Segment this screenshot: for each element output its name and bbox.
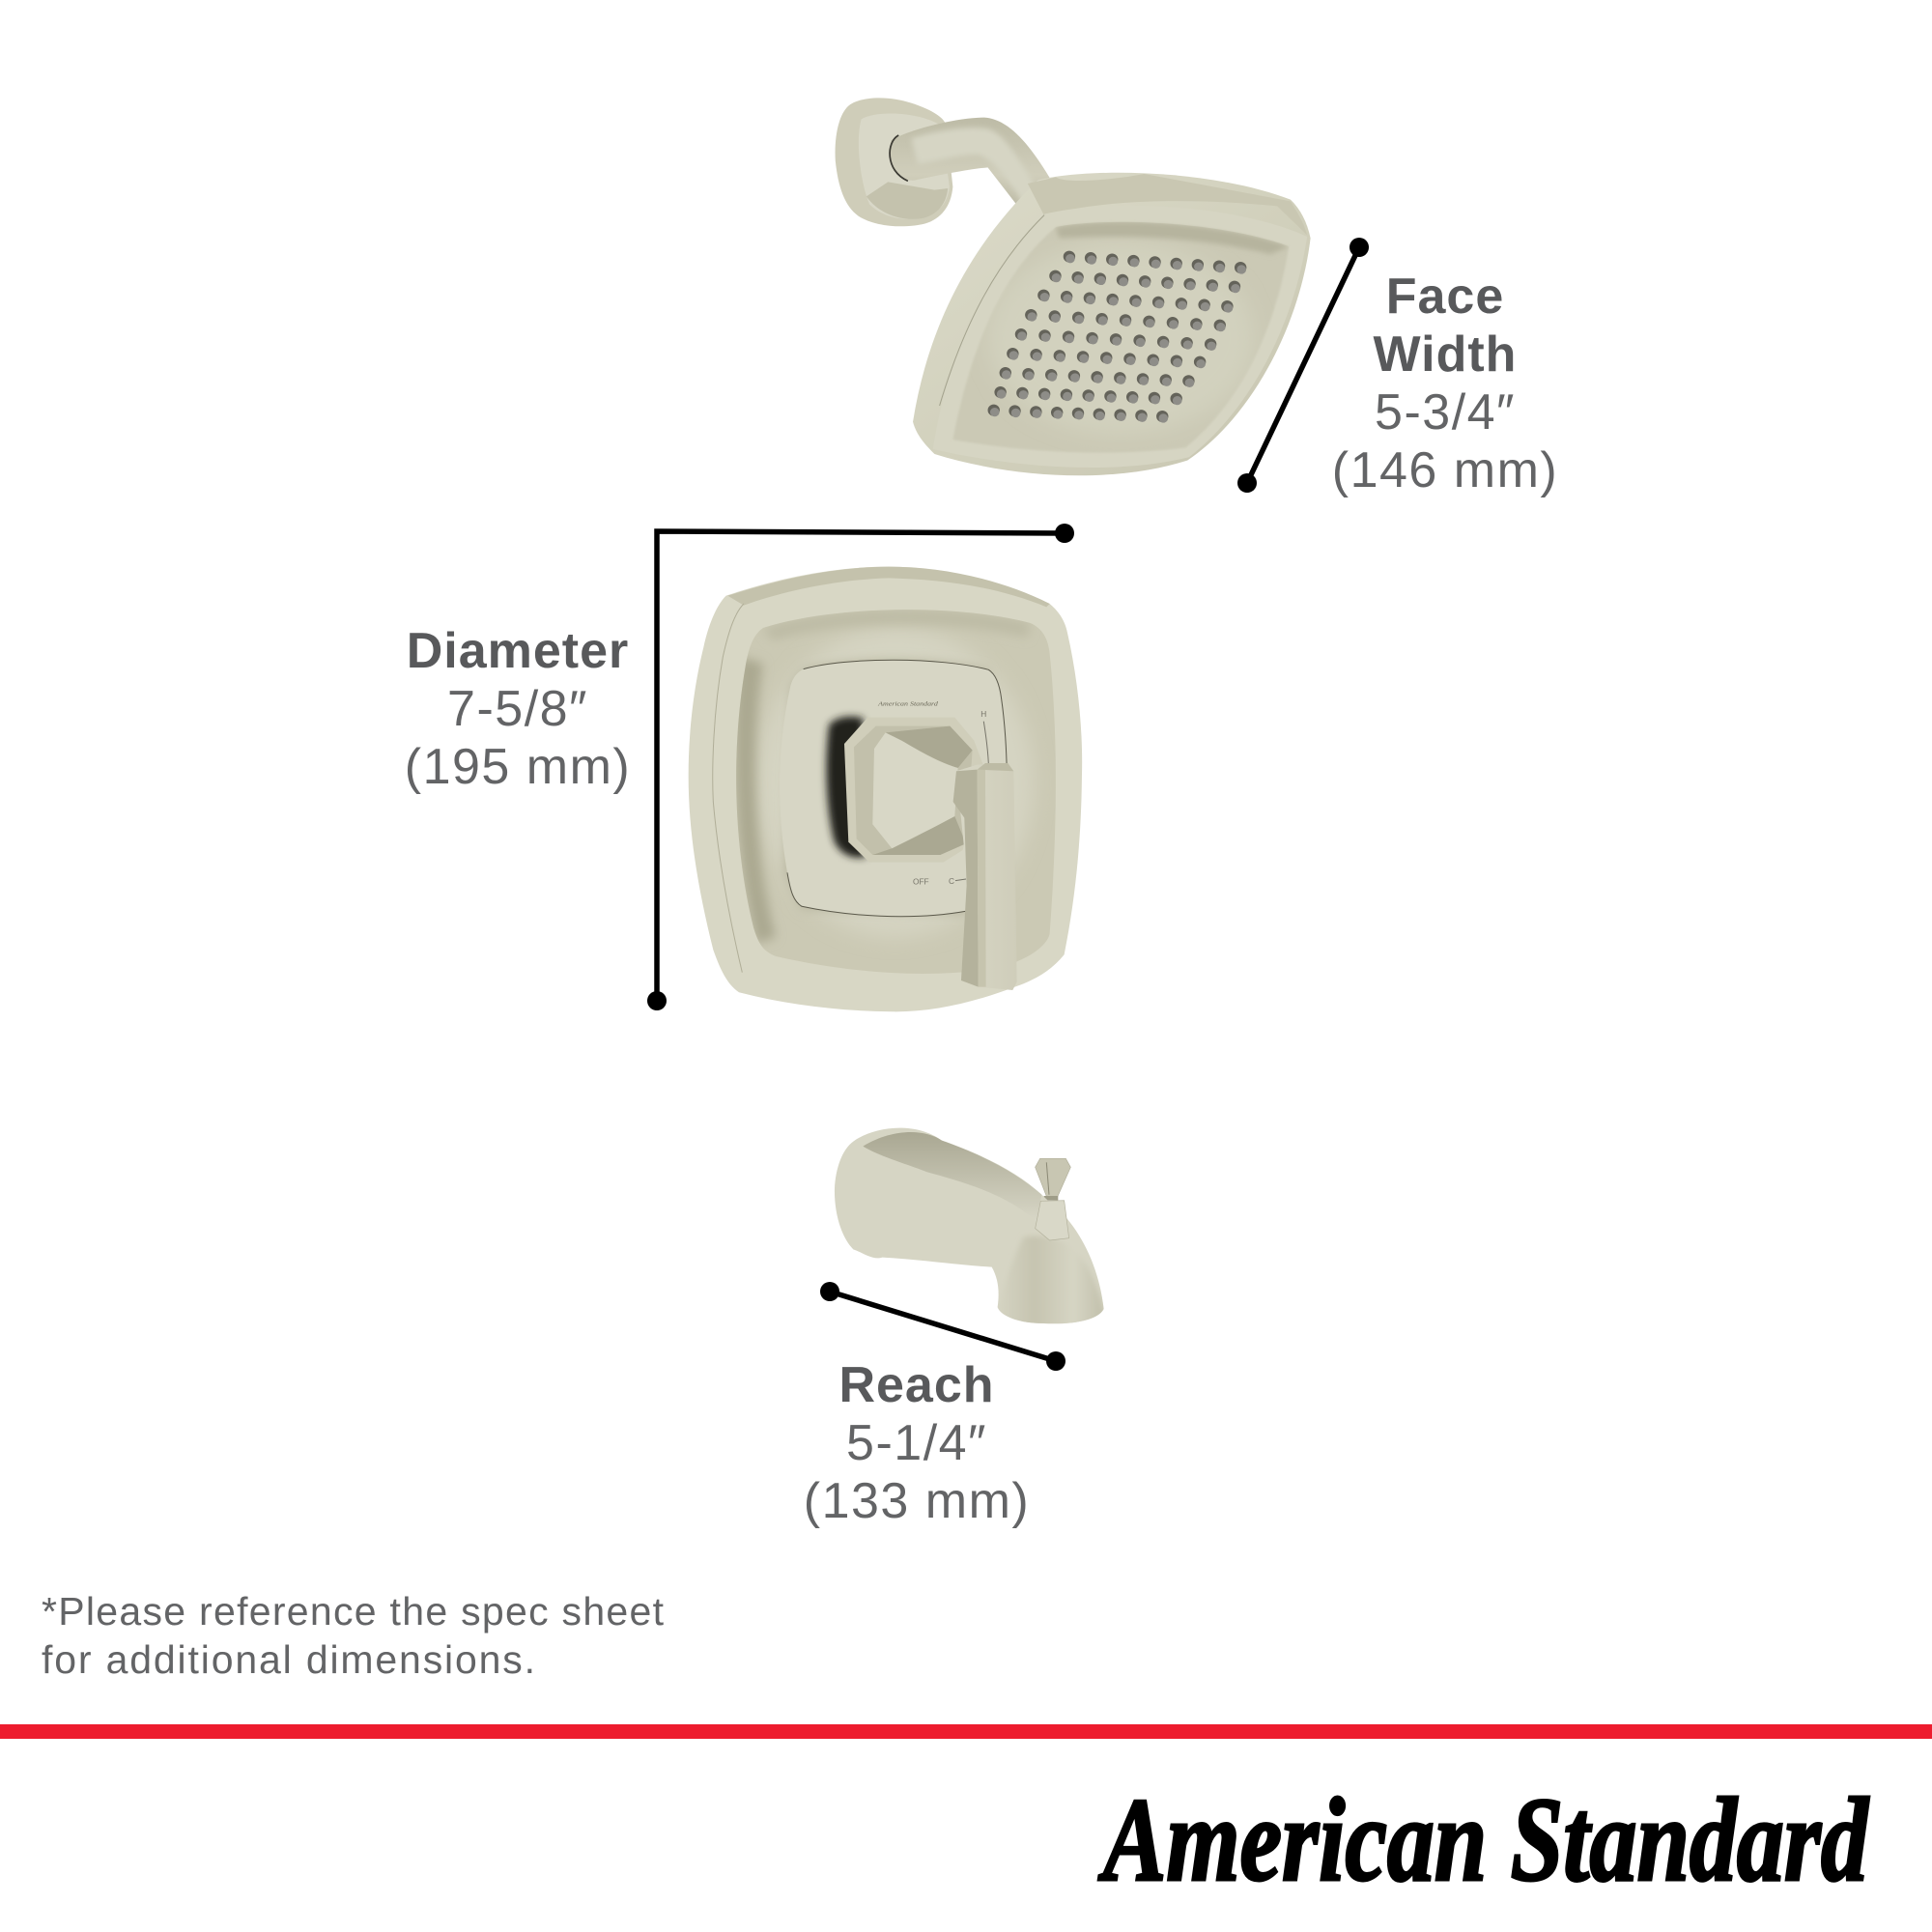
spout body [835,1128,1104,1323]
label: face width: 5-3/4″ [1375,384,1516,440]
label: reach [804,1357,1030,1529]
spray nozzles [994,257,1242,418]
footnote [42,1589,665,1682]
label: reach: 5-1/4″ [846,1415,987,1471]
label: reach: Reach [838,1357,995,1413]
stamped brand text: American Standard [877,701,939,708]
dimension line: reach [820,1282,1065,1371]
hot marker [980,709,988,763]
knob shadow [827,717,867,858]
spout neck shading [995,1236,1108,1326]
shower arm [890,118,1071,232]
label: diameter: Diameter [407,623,629,679]
label: diameter: 7-5/8″ [447,681,588,737]
centre escutcheon [780,660,1007,917]
off and cold markers: OFF [913,877,929,887]
label: diameter [405,623,631,795]
label: diameter: (195 mm) [405,739,631,795]
wall flange [836,98,952,226]
plate recess [736,610,1056,974]
label: reach: (133 mm) [804,1473,1030,1529]
label: face width: Width [1374,327,1517,383]
hot marker: H [980,709,986,719]
octagonal knob [844,718,983,863]
off and cold markers [913,876,966,887]
dimension line: face width [1237,238,1369,493]
head recessed face [952,222,1289,453]
footnote: *Please reference the spec sheet [42,1589,665,1634]
head inner rim [933,206,1307,468]
footnote: for additional dimensions. [42,1637,535,1682]
off and cold markers: C [949,876,954,886]
lever handle [953,763,1017,990]
head collar [1028,174,1307,235]
diverter stem [1036,1201,1069,1240]
shower head illustration [836,98,1311,475]
label: face width: Face [1386,269,1504,325]
head rim [913,173,1311,475]
outer plate [689,567,1082,1011]
shower valve trim plate illustration [689,567,1082,1011]
label: face width [1332,269,1558,498]
tub spout illustration [835,1128,1108,1326]
diverter knob [1036,1158,1070,1201]
label: face width: (146 mm) [1332,442,1558,498]
dimension line: diameter [647,524,1074,1010]
red divider bar [0,1724,1932,1739]
